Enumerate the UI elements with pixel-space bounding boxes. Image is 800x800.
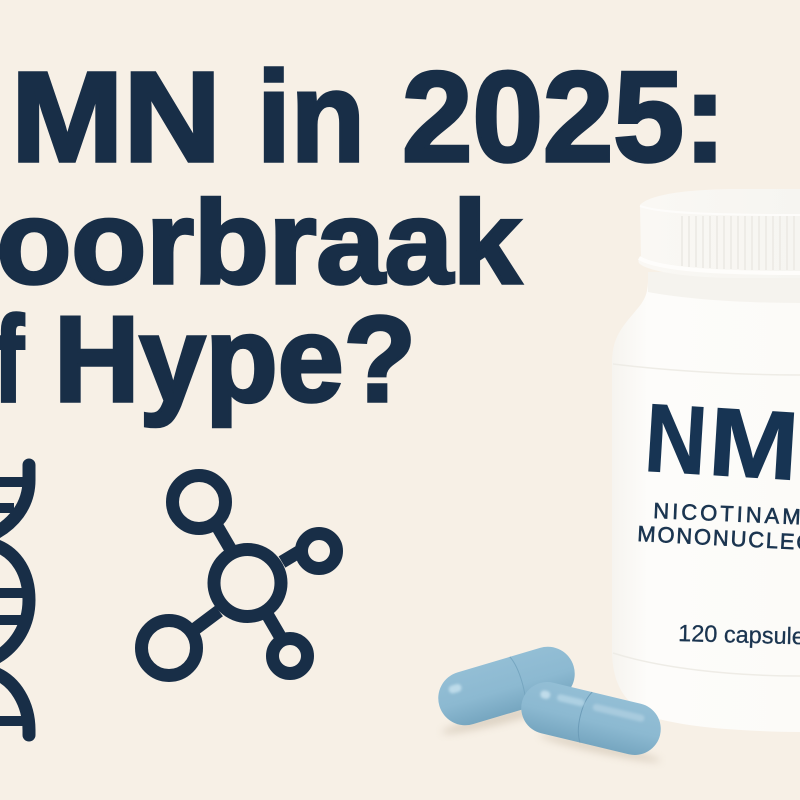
bottle text NMN bbox=[642, 383, 800, 506]
capsule right bbox=[516, 677, 666, 760]
neck bbox=[648, 272, 800, 303]
title line 3: of Hype?: Hype? bbox=[54, 291, 416, 427]
icon: molecule bbox=[142, 476, 336, 676]
icon: DNA helix bbox=[0, 465, 29, 735]
bottle cap bbox=[638, 189, 800, 278]
capsule left bbox=[432, 640, 581, 732]
bottle label edges bbox=[613, 364, 800, 676]
bottle text NMN: N bbox=[642, 383, 710, 495]
title line 1: NMN in 2025:: in bbox=[257, 46, 365, 189]
capsule shadows bbox=[440, 698, 662, 766]
title line 1: NMN in 2025:: 2025: bbox=[402, 46, 726, 189]
title bbox=[0, 46, 726, 427]
title line 1: NMN in 2025:: MN bbox=[11, 46, 221, 189]
bottle text NMN: M bbox=[706, 387, 800, 501]
pill bottle bbox=[612, 189, 800, 732]
bottle body bbox=[612, 280, 800, 732]
title line 1: NMN in 2025: bbox=[0, 46, 726, 189]
cap ribs bbox=[682, 216, 794, 270]
